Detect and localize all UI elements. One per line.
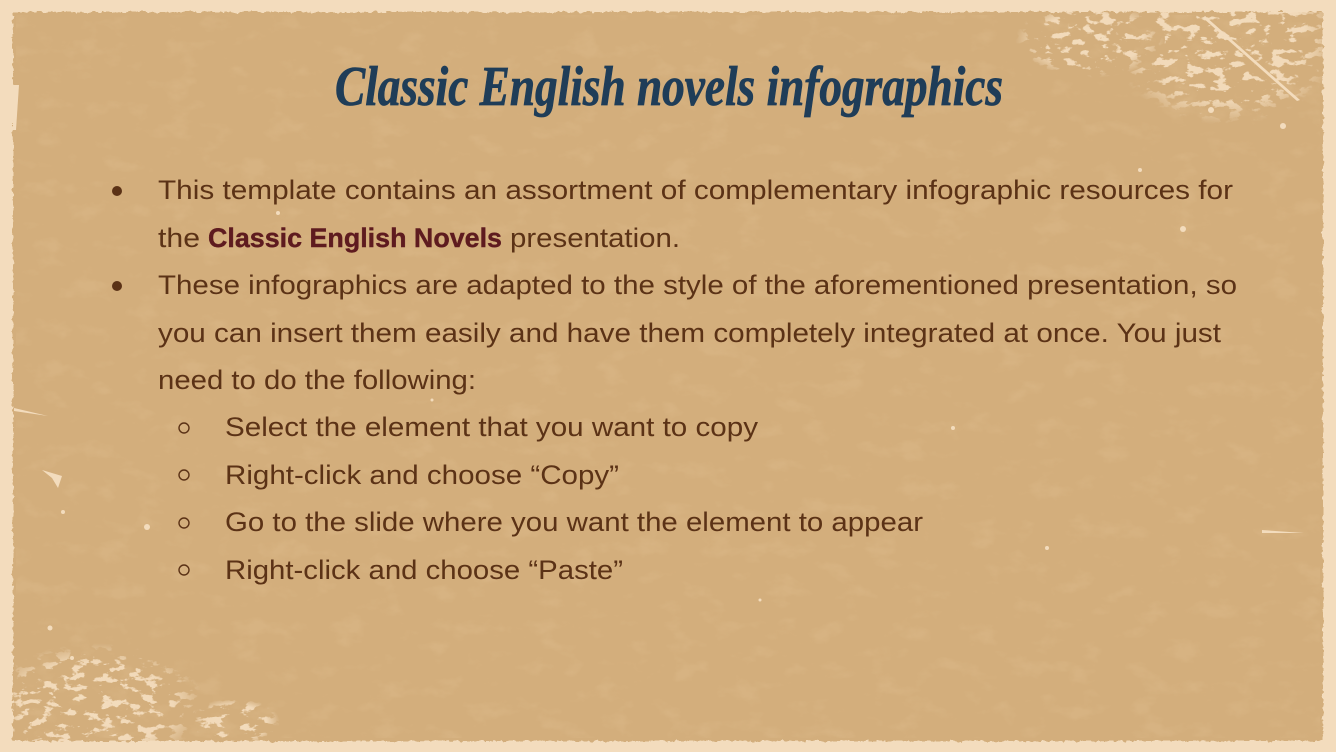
second bullet: need to do the following: bbox=[158, 365, 476, 395]
sub-list steps: Right-click and choose “Paste” bbox=[225, 555, 623, 585]
bullet list bbox=[112, 175, 1237, 585]
first bullet: the bbox=[158, 223, 200, 253]
second bullet bbox=[112, 270, 1237, 395]
sub-list steps: Go to the slide where you want the element to appear bbox=[225, 507, 923, 537]
sub-list steps: Right-click and choose “Copy” bbox=[225, 460, 619, 490]
sub-list steps bbox=[179, 412, 923, 585]
second bullet: These infographics are adapted to the style of the aforementioned presentation, so bbox=[158, 270, 1237, 300]
first bullet bbox=[112, 175, 1233, 253]
sub-list steps: Select the element that you want to copy bbox=[225, 412, 759, 442]
title: Classic English novels infographics bbox=[335, 56, 1003, 118]
second bullet: you can insert them easily and have them completely integrated at once. You just bbox=[158, 318, 1222, 348]
first bullet: This template contains an assortment of complementary infographic resources for bbox=[158, 175, 1233, 205]
first bullet: presentation. bbox=[510, 223, 680, 253]
first bullet: Classic English Novels bbox=[208, 223, 502, 253]
